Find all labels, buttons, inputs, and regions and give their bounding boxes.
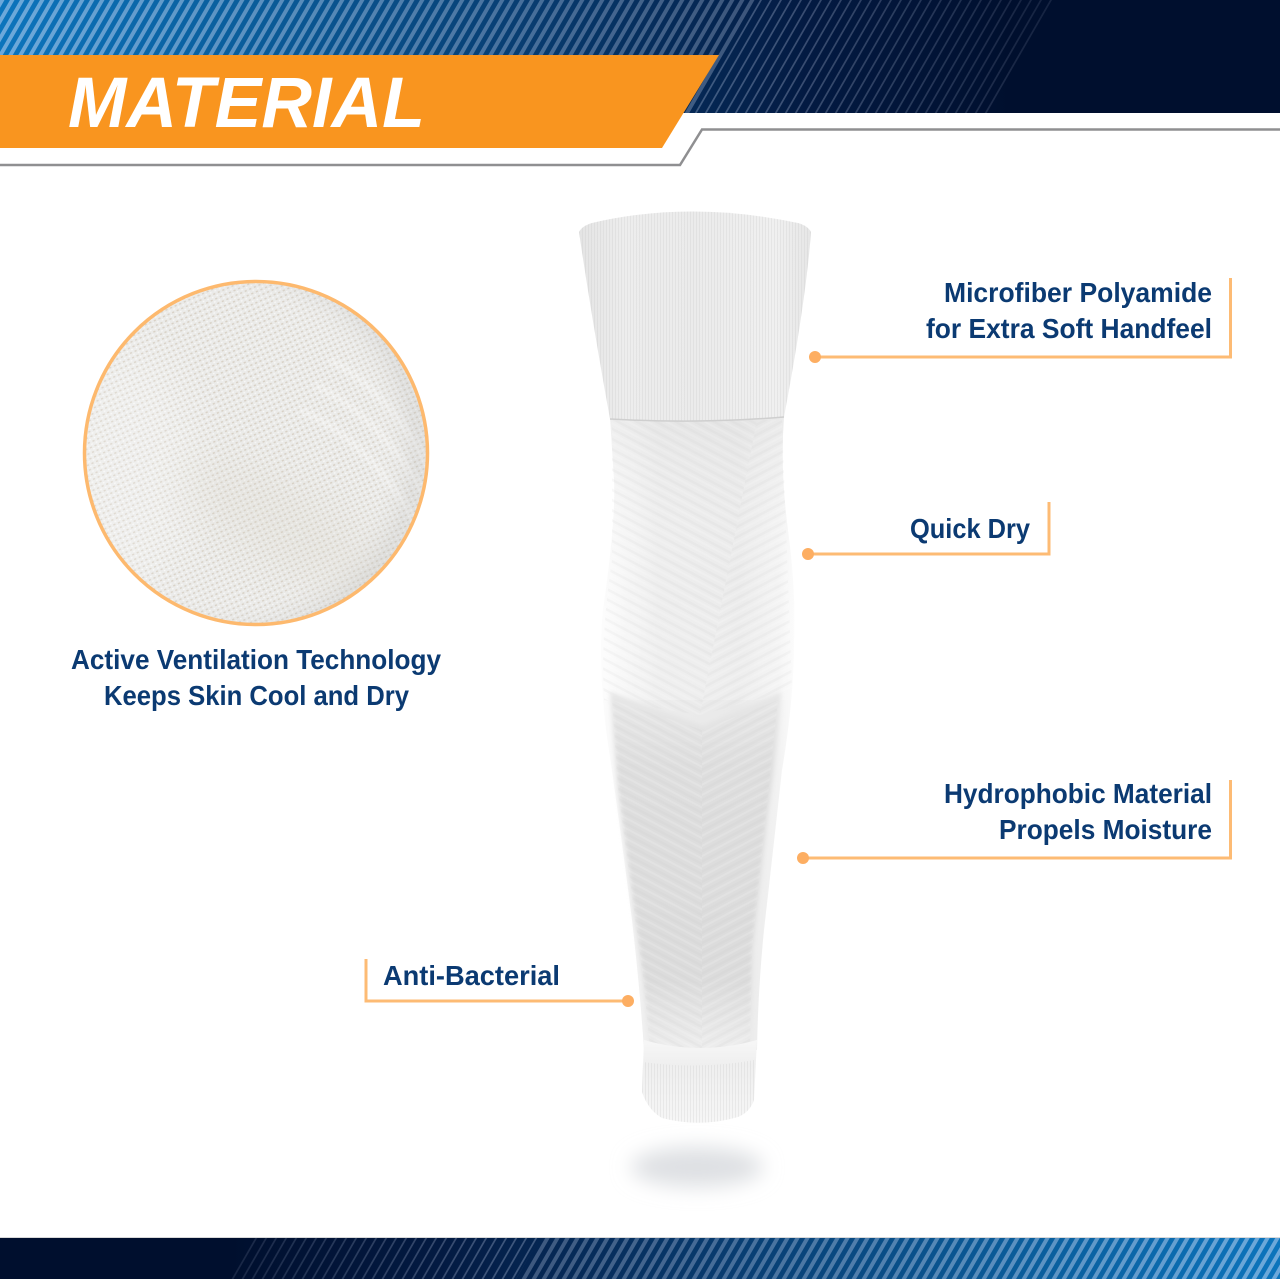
- ankle cuff: [642, 1040, 757, 1123]
- callout: hydrophobic material: Propels Moisture: [999, 814, 1212, 845]
- header banner with diagonal stripes: [0, 0, 1280, 113]
- fabric close-up circle: [70, 282, 435, 625]
- callout: microfiber polyamide: for Extra Soft Handfeel: [926, 313, 1212, 344]
- footer banner with diagonal stripes: [0, 1237, 1280, 1279]
- title: MATERIAL: [68, 64, 425, 143]
- callout: anti-bacterial: Anti-Bacterial: [383, 960, 560, 991]
- sock product illustration: [579, 212, 811, 1187]
- callout: microfiber polyamide: Microfiber Polyamide: [944, 277, 1212, 308]
- caption: active ventilation: Keeps Skin Cool and Dry: [104, 680, 409, 711]
- sleeve body: [601, 417, 794, 1050]
- grey header rule: [0, 130, 1280, 165]
- callout: quick dry: [802, 502, 1049, 560]
- caption: active ventilation: [71, 644, 441, 711]
- title banner: [0, 55, 719, 148]
- top cuff: [579, 212, 811, 421]
- floor shadow: [631, 1147, 763, 1187]
- callout: anti-bacterial: [366, 959, 634, 1007]
- callout: microfiber polyamide: [809, 277, 1230, 363]
- callout: quick dry: Quick Dry: [910, 513, 1030, 544]
- callout: hydrophobic material: Hydrophobic Material: [944, 778, 1212, 809]
- caption: active ventilation: Active Ventilation Technology: [71, 644, 441, 675]
- callout: hydrophobic material: [797, 778, 1230, 864]
- knit chevrons upper: [603, 420, 757, 715]
- lower calf panel: [610, 692, 781, 1052]
